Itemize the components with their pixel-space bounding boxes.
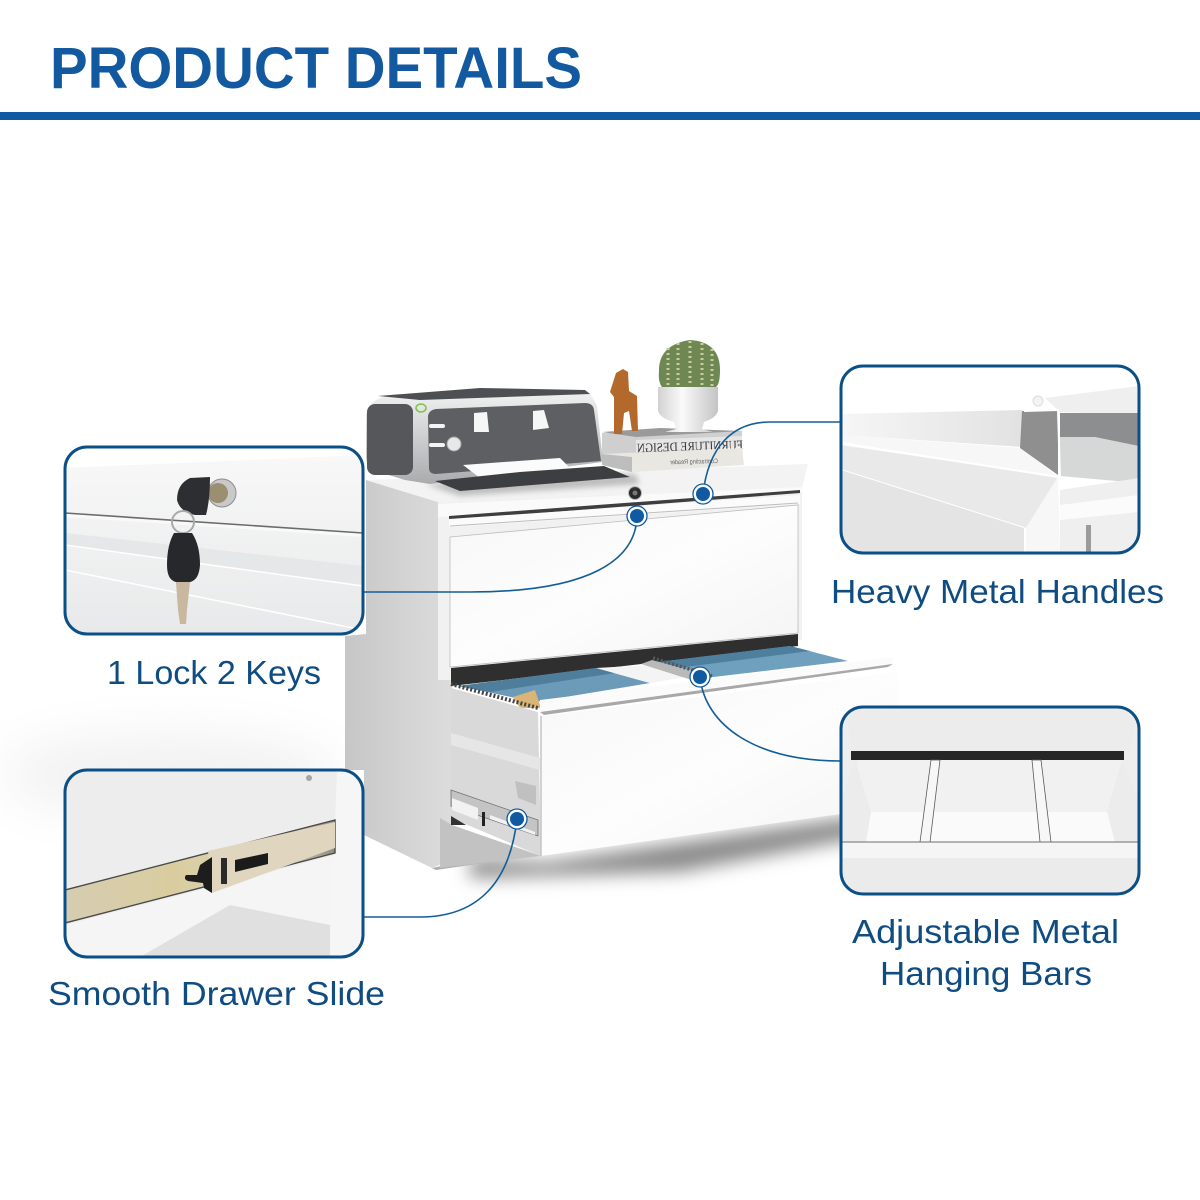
lower book	[602, 448, 744, 472]
panel frame	[65, 770, 363, 957]
rail slot	[235, 853, 268, 872]
marker: lock	[627, 506, 647, 526]
hanging files	[451, 646, 848, 708]
drawer front	[841, 858, 1139, 894]
label: lock: 1 Lock 2 Keys	[107, 654, 321, 691]
panel frame	[841, 707, 1139, 894]
cactus ribs	[668, 341, 712, 386]
drawer floor	[858, 812, 1123, 842]
adjustable bar left	[920, 760, 940, 842]
printer left panel	[367, 404, 413, 475]
handle end	[1020, 410, 1058, 475]
panel: drawer slide	[65, 770, 363, 957]
marker: handles	[693, 484, 713, 504]
top drawer handle	[438, 487, 802, 527]
mirrored book title: FURNITURE DESIGN	[636, 437, 743, 455]
dark gap	[851, 751, 1124, 760]
key head	[177, 477, 210, 515]
printer output tray	[435, 466, 630, 491]
lock cylinder	[208, 479, 236, 507]
drawer back wall	[858, 760, 1123, 812]
product: filing cabinet	[345, 464, 900, 878]
marker: hanging bars	[690, 667, 710, 687]
cabinet side	[345, 480, 452, 868]
books	[602, 428, 744, 472]
cabinet top	[366, 464, 808, 502]
printer body	[366, 393, 603, 484]
key fob	[167, 533, 200, 582]
key ring	[172, 511, 194, 533]
rail	[65, 820, 335, 923]
marker dots	[507, 484, 713, 829]
title: PRODUCT DETAILS	[50, 36, 582, 101]
drawer slide rail	[451, 781, 538, 836]
soft floor shading	[0, 735, 340, 815]
panel frame	[841, 366, 1139, 553]
printer	[366, 388, 640, 496]
handle lip	[841, 410, 1022, 447]
front lip	[841, 842, 1139, 858]
drawer face	[841, 470, 1024, 553]
floor shadow	[470, 815, 900, 878]
rail plastic clip	[185, 857, 212, 893]
right wall	[1107, 812, 1123, 842]
dark drawer gap	[451, 634, 798, 686]
side post	[334, 772, 362, 956]
potted cactus	[658, 340, 720, 432]
connector lines	[363, 422, 841, 917]
cabinet base recess	[440, 818, 541, 868]
screw hole	[306, 775, 312, 781]
open drawer side panel	[451, 688, 541, 856]
key blade	[176, 582, 190, 624]
drawer slope	[841, 445, 1058, 528]
top drawer front	[450, 505, 798, 667]
cactus plant	[659, 340, 720, 387]
mirrored book subtitle: Contracting Reader	[669, 458, 718, 466]
top book	[602, 431, 742, 456]
header rule	[0, 112, 1200, 120]
label: slide: Smooth Drawer Slide	[48, 975, 385, 1012]
rail latch	[221, 858, 227, 884]
wooden figure	[610, 369, 638, 434]
panel frame	[65, 447, 363, 634]
upper drawer face	[845, 707, 1139, 751]
label: hanging bars: Hanging Bars	[880, 955, 1092, 992]
panel: metal handles	[841, 366, 1139, 553]
label: hanging bars: Adjustable Metal	[852, 913, 1119, 950]
printer buttons	[429, 410, 549, 451]
cabinet foot	[432, 856, 490, 870]
adjustable bar right	[1032, 760, 1051, 842]
panel: hanging bars	[841, 707, 1139, 894]
cabinet body front	[438, 486, 802, 680]
printer status light	[416, 404, 426, 412]
rail carriage	[208, 822, 335, 893]
printer control front	[428, 403, 601, 474]
left wall	[858, 812, 871, 842]
bottom drawer front	[541, 672, 898, 856]
printer paper	[463, 458, 570, 478]
printer lid	[378, 388, 590, 400]
marker: slide	[507, 809, 527, 829]
panel: lock and keys	[65, 447, 363, 634]
drawer corner edge	[540, 716, 542, 856]
label: handles: Heavy Metal Handles	[831, 573, 1164, 610]
lock cylinder	[628, 486, 642, 500]
bottom drawer handle	[540, 657, 893, 715]
drawer side crease	[451, 733, 540, 770]
printer shadow	[425, 474, 640, 496]
plant pot	[658, 387, 718, 432]
